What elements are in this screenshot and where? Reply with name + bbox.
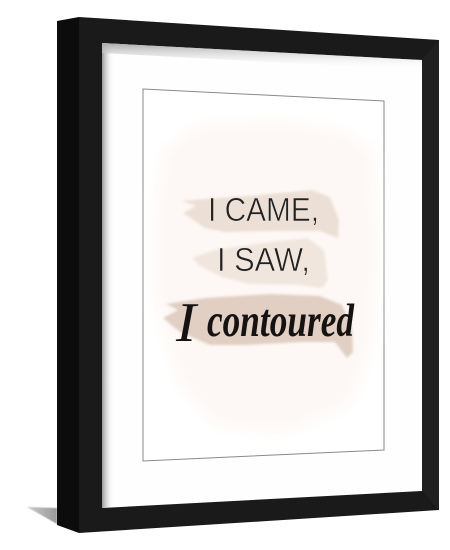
- text: I SAW,: I SAW,: [217, 241, 310, 278]
- print paper: [143, 89, 384, 461]
- art print: [143, 89, 384, 461]
- pale watercolor wash: [155, 122, 378, 432]
- text: I CAME,: I CAME,: [208, 191, 319, 228]
- brush stroke: I saw: [192, 238, 328, 288]
- brush stroke: I came: [182, 190, 339, 238]
- script capital I: I: [175, 292, 199, 354]
- frame: [57, 17, 439, 533]
- brush stroke: I contoured: [163, 294, 353, 358]
- script word contoured: contoured: [207, 295, 355, 347]
- mat board: [102, 43, 422, 508]
- text: I contoured: [175, 292, 355, 354]
- floor shadow: [27, 507, 57, 524]
- mat inner shadow top: [102, 43, 422, 70]
- frame front face: [79, 17, 439, 533]
- mat inner shadow left: [102, 43, 114, 508]
- frame side face: [57, 17, 79, 533]
- right frame edge: [422, 40, 439, 510]
